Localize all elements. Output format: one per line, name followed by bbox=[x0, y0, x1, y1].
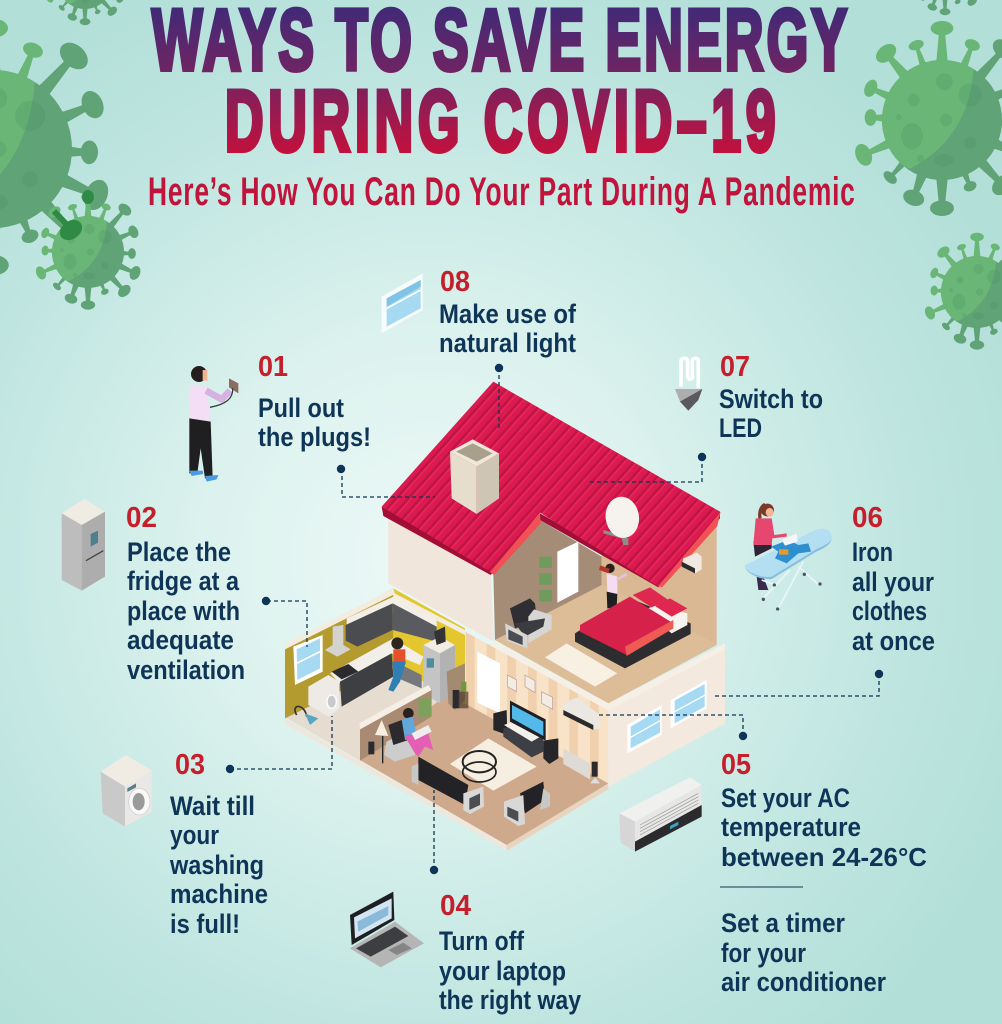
text 06 bbox=[852, 537, 935, 656]
bedroom person bbox=[599, 564, 627, 608]
kitchen person bbox=[388, 637, 406, 692]
icon: virus right small bbox=[923, 233, 1002, 350]
upper floor left outer wall bbox=[388, 517, 494, 642]
number 06: 06 bbox=[852, 502, 883, 534]
number 01: 01 bbox=[258, 351, 288, 383]
number 02: 02 bbox=[126, 502, 157, 534]
text 04 bbox=[439, 926, 581, 1015]
text 05: Set your AC bbox=[721, 783, 850, 813]
text 05 timer bbox=[721, 908, 886, 997]
bed bbox=[575, 587, 691, 668]
icon: virus top right small bbox=[904, 0, 986, 15]
text 04: the right way bbox=[439, 985, 581, 1015]
text 05: between 24-26°C bbox=[721, 842, 927, 872]
text 07: LED bbox=[719, 413, 762, 443]
text 02: adequate bbox=[127, 625, 234, 655]
text 05 timer: for your bbox=[721, 938, 806, 968]
number 07: 07 bbox=[720, 351, 750, 383]
number 04: 04 bbox=[440, 890, 471, 922]
text 03: is full! bbox=[170, 909, 240, 939]
text 08: natural light bbox=[439, 328, 576, 358]
rug and coffee table bbox=[450, 738, 537, 791]
sofa bbox=[412, 757, 484, 814]
kitchen walls bbox=[285, 588, 465, 718]
kitchen fridge bbox=[423, 627, 465, 710]
text 03 bbox=[169, 791, 268, 939]
number 05: 05 bbox=[721, 749, 751, 781]
icon: man unplugging bbox=[189, 366, 238, 482]
text 02: Place the bbox=[127, 537, 231, 567]
text 06: clothes bbox=[852, 596, 927, 626]
virus overlap shading bbox=[54, 190, 94, 244]
text 03: machine bbox=[170, 879, 268, 909]
living room door bbox=[477, 652, 500, 713]
text 02: fridge at a bbox=[127, 566, 240, 596]
text 02: ventilation bbox=[127, 655, 245, 685]
icon: virus top left small bbox=[44, 0, 126, 25]
title bbox=[152, 0, 847, 170]
text 07 bbox=[719, 384, 823, 443]
exterior right wall bbox=[608, 645, 725, 787]
icon: washing machine bbox=[101, 755, 152, 827]
divider bbox=[720, 886, 803, 888]
speakers and plant bbox=[453, 682, 468, 708]
bedroom back wall bbox=[602, 527, 717, 645]
heater and speaker bbox=[563, 748, 600, 783]
striped living room wall bbox=[465, 632, 608, 783]
text 07: Switch to bbox=[719, 384, 823, 414]
panel: step 02 bbox=[62, 499, 245, 685]
roof bbox=[382, 382, 720, 587]
icon: air conditioner bbox=[619, 777, 702, 852]
panel: step 01 bbox=[189, 351, 371, 482]
icon: virus left small bbox=[34, 193, 143, 310]
armchair bbox=[504, 782, 550, 826]
illustration: cutaway house bbox=[285, 382, 725, 851]
number 08: 08 bbox=[440, 266, 470, 298]
icon: laptop bbox=[350, 892, 424, 967]
sitting person with lamp and chair bbox=[368, 708, 433, 763]
text 06: all your bbox=[852, 567, 934, 597]
icon: LED bulb bbox=[675, 358, 702, 411]
text 01: the plugs! bbox=[258, 422, 371, 452]
bedroom rug bbox=[545, 643, 617, 687]
panel: step 04 bbox=[350, 890, 581, 1015]
panel: step 07 bbox=[675, 351, 823, 443]
text 05 timer: air conditioner bbox=[721, 967, 886, 997]
text 02 bbox=[127, 537, 245, 685]
bookshelves bbox=[539, 557, 552, 601]
icon: woman ironing bbox=[744, 504, 832, 611]
roof underside bbox=[382, 507, 720, 587]
bedroom wall air conditioner bbox=[682, 553, 702, 573]
icon: virus left large bbox=[0, 19, 113, 275]
text 04: your laptop bbox=[439, 956, 566, 986]
kitchen cabinets and counter bbox=[295, 597, 437, 725]
bedroom left wall bbox=[493, 520, 602, 640]
wall pictures bbox=[507, 675, 553, 709]
half wall partition bbox=[359, 685, 432, 761]
text 01: Pull out bbox=[258, 393, 344, 423]
panel: step 03 bbox=[101, 749, 268, 939]
text 02: place with bbox=[127, 596, 240, 626]
text 05: temperature bbox=[721, 812, 861, 842]
icon: window bbox=[382, 273, 423, 333]
text 04: Turn off bbox=[439, 926, 525, 956]
text 08: Make use of bbox=[439, 299, 577, 329]
text 01 bbox=[258, 393, 371, 452]
text 05 timer: Set a timer bbox=[721, 908, 845, 938]
panel: step 06 bbox=[744, 502, 935, 656]
kitchen window bbox=[293, 635, 323, 685]
chimney bbox=[450, 439, 499, 514]
connectors bbox=[226, 364, 883, 874]
slab and floors bbox=[285, 663, 608, 851]
subtitle: Here’s How You Can Do Your Part During A Pandemic bbox=[148, 170, 855, 214]
text 03: washing bbox=[169, 850, 264, 880]
panel: step 08 bbox=[382, 266, 577, 358]
exterior windows bbox=[627, 680, 707, 753]
television and stand bbox=[493, 701, 558, 764]
panel: step 05 bbox=[619, 749, 927, 997]
bedroom door bbox=[557, 542, 578, 603]
title: DURING COVID–19 bbox=[225, 74, 776, 170]
text 06: at once bbox=[852, 626, 935, 656]
text 06: Iron bbox=[852, 537, 893, 567]
satellite dish bbox=[603, 495, 642, 545]
roof gable edges bbox=[490, 512, 721, 587]
text 03: Wait till bbox=[170, 791, 255, 821]
floor trim bbox=[493, 641, 725, 711]
bedroom floor bbox=[495, 585, 717, 703]
icon: fridge bbox=[62, 499, 105, 591]
icon: virus right large bbox=[852, 21, 1002, 216]
text 03: your bbox=[170, 820, 219, 850]
text 05 bbox=[721, 783, 927, 872]
number 03: 03 bbox=[175, 749, 205, 781]
wall air conditioner bbox=[563, 697, 600, 730]
text 08 bbox=[439, 299, 577, 358]
bedroom armchair bbox=[505, 598, 552, 648]
